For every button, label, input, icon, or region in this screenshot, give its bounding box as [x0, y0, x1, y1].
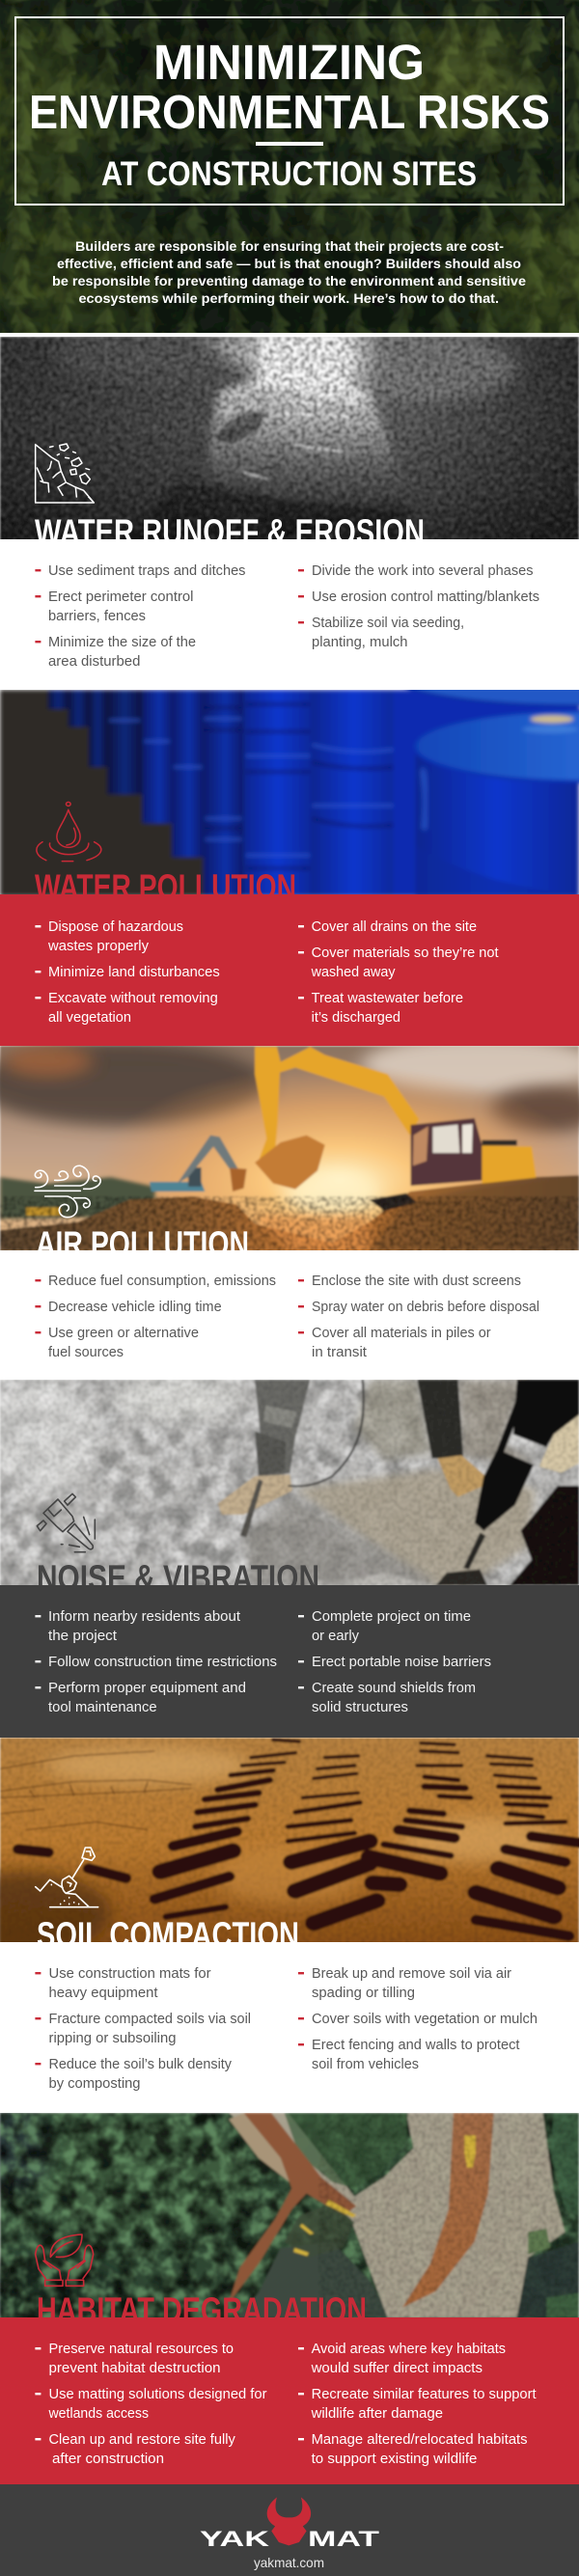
photo: wet asphalt runoff [0, 337, 579, 539]
icon: jackhammer [37, 1494, 95, 1552]
panel: noise tips [0, 1585, 579, 1738]
right tips: Erect portable noise barriers [312, 1654, 491, 1670]
left tips: Preserve natural resources to [48, 2341, 234, 2357]
panel: water runoff tips [0, 539, 579, 690]
intro text block: ecosystems while performing their work. Here’s how to do that. [79, 290, 499, 306]
left tips: barriers, fences [48, 608, 146, 624]
left tips: Perform proper equipment and [48, 1680, 246, 1696]
heading: soil compaction: SOIL COMPACTION [37, 1915, 299, 1955]
left tips: Decrease vehicle idling time [48, 1299, 222, 1315]
right tips: solid structures [312, 1699, 408, 1715]
intro text block: Builders are responsible for ensuring that their projects are cost- [75, 238, 504, 254]
title line 2: ENVIRONMENTAL RISKS [29, 87, 550, 139]
left tips: area disturbed [48, 653, 140, 670]
left tips: Reduce the soil’s bulk density [48, 2056, 232, 2072]
subtitle: AT CONSTRUCTION SITES [101, 155, 477, 193]
right tips: to support existing wildlife [312, 2451, 477, 2467]
photo: blue chemical drums [0, 690, 579, 894]
photo: excavators at sunset [0, 1046, 579, 1250]
photo: jackhammers on rubble [0, 1377, 579, 1587]
right tips: Recreate similar features to support [312, 2386, 537, 2402]
left tips: prevent habitat destruction [48, 2360, 220, 2376]
right tips [298, 1273, 539, 1360]
left tips: Inform nearby residents about [48, 1608, 241, 1625]
right tips [298, 562, 539, 650]
right tips: Cover all materials in piles or [312, 1325, 491, 1341]
right tips: wildlife after damage [311, 2405, 443, 2422]
right tips [298, 1608, 491, 1715]
intro text block: effective, efficient and safe — but is that enough? Builders should also [57, 256, 521, 271]
panel: header forest background [0, 0, 579, 357]
right tips: Cover materials so they’re not [312, 945, 499, 961]
left tips: Use sediment traps and ditches [48, 562, 245, 579]
panel: soil compaction tips [0, 1942, 579, 2113]
icon: wind swirls [35, 1165, 100, 1218]
right tips: washed away [311, 964, 396, 980]
right tips: Avoid areas where key habitats [312, 2341, 506, 2357]
right tips: Cover soils with vegetation or mulch [312, 2011, 538, 2027]
heading: habitat degradation: HABITAT DEGRADATION [37, 2290, 367, 2330]
right tips: Complete project on time [312, 1608, 471, 1625]
left tips: after construction [52, 2451, 164, 2467]
icon: shovel in soil [36, 1848, 98, 1907]
logo: yak head [267, 2497, 311, 2545]
left tips: Use green or alternative [48, 1325, 199, 1341]
website url: yakmat.com [254, 2555, 324, 2570]
icon: erosion cliff [36, 444, 94, 503]
left tips [35, 918, 220, 1026]
left tips: the project [48, 1628, 118, 1644]
left tips: Use construction mats for [48, 1965, 211, 1982]
left tips [35, 2341, 267, 2467]
logo: wordmark YAK: YAK [200, 2527, 269, 2551]
photo: aerial of cleared forest [0, 2110, 579, 2328]
left tips: all vegetation [48, 1009, 131, 1026]
right tips [298, 1965, 538, 2072]
right tips: Manage altered/relocated habitats [312, 2431, 528, 2448]
left tips: fuel sources [48, 1344, 124, 1360]
right tips: Treat wastewater before [312, 990, 463, 1006]
intro text block [52, 238, 526, 306]
right tips: in transit [312, 1344, 368, 1360]
panel: air pollution tips [0, 1250, 579, 1380]
left tips: Erect perimeter control [48, 589, 193, 605]
left tips: Minimize land disturbances [48, 964, 220, 980]
left tips: Reduce fuel consumption, emissions [48, 1273, 276, 1289]
left tips [35, 1273, 276, 1360]
left tips: wetlands access [48, 2405, 149, 2422]
right tips: soil from vehicles [312, 2056, 419, 2072]
left tips: heavy equipment [48, 1985, 158, 2001]
photo: soil with tyre tracks [0, 1738, 579, 1956]
left tips [35, 562, 246, 670]
left tips [35, 1965, 251, 2092]
right tips: Create sound shields from [312, 1680, 476, 1696]
right tips: planting, mulch [312, 634, 407, 650]
right tips: Break up and remove soil via air [312, 1965, 511, 1982]
right tips: would suffer direct impacts [311, 2360, 482, 2376]
left tips: Clean up and restore site fully [48, 2431, 235, 2448]
left tips [35, 1608, 277, 1715]
left tips: ripping or subsoiling [48, 2030, 176, 2046]
footer band [0, 2484, 579, 2576]
logo: wordmark MAT: MAT [308, 2527, 380, 2551]
right tips: Cover all drains on the site [312, 918, 477, 935]
right tips [298, 918, 499, 1026]
right tips: Erect fencing and walls to protect [312, 2037, 520, 2053]
right tips [298, 2341, 537, 2467]
right tips: or early [312, 1628, 359, 1644]
heading: water runoff and erosion: WATER RUNOFF & EROSION [35, 512, 425, 552]
heading: water pollution: WATER POLLUTION [35, 867, 296, 907]
left tips: by composting [48, 2075, 141, 2092]
title box [15, 17, 564, 205]
panel: habitat tips [0, 2317, 579, 2484]
left tips: Follow construction time restrictions [48, 1654, 277, 1670]
header divider [0, 333, 579, 337]
heading: noise and vibration: NOISE & VIBRATION [37, 1558, 319, 1598]
right tips: Divide the work into several phases [312, 562, 534, 579]
title line 1: MINIMIZING [153, 35, 425, 90]
intro text block: be responsible for preventing damage to the environment and sensitive [52, 273, 526, 288]
right tips: spading or tilling [312, 1985, 415, 2001]
left tips: wastes properly [47, 938, 149, 954]
icon: water drop with ripples [37, 802, 101, 862]
panel: water pollution tips [0, 894, 579, 1046]
left tips: Minimize the size of the [48, 634, 196, 650]
icon: hands holding leaf [36, 2234, 94, 2286]
right tips: Spray water on debris before disposal [312, 1299, 539, 1315]
right tips: Use erosion control matting/blankets [312, 589, 539, 605]
right tips: it’s discharged [312, 1009, 400, 1026]
heading: air pollution: AIR POLLUTION [36, 1224, 249, 1264]
right tips: Stabilize soil via seeding, [312, 615, 464, 631]
left tips: tool maintenance [48, 1699, 157, 1715]
left tips: Dispose of hazardous [48, 918, 183, 935]
left tips: Use matting solutions designed for [48, 2386, 266, 2402]
right tips: Enclose the site with dust screens [312, 1273, 521, 1289]
title divider [256, 142, 323, 146]
left tips: Excavate without removing [48, 990, 218, 1006]
left tips: Fracture compacted soils via soil [48, 2011, 251, 2027]
